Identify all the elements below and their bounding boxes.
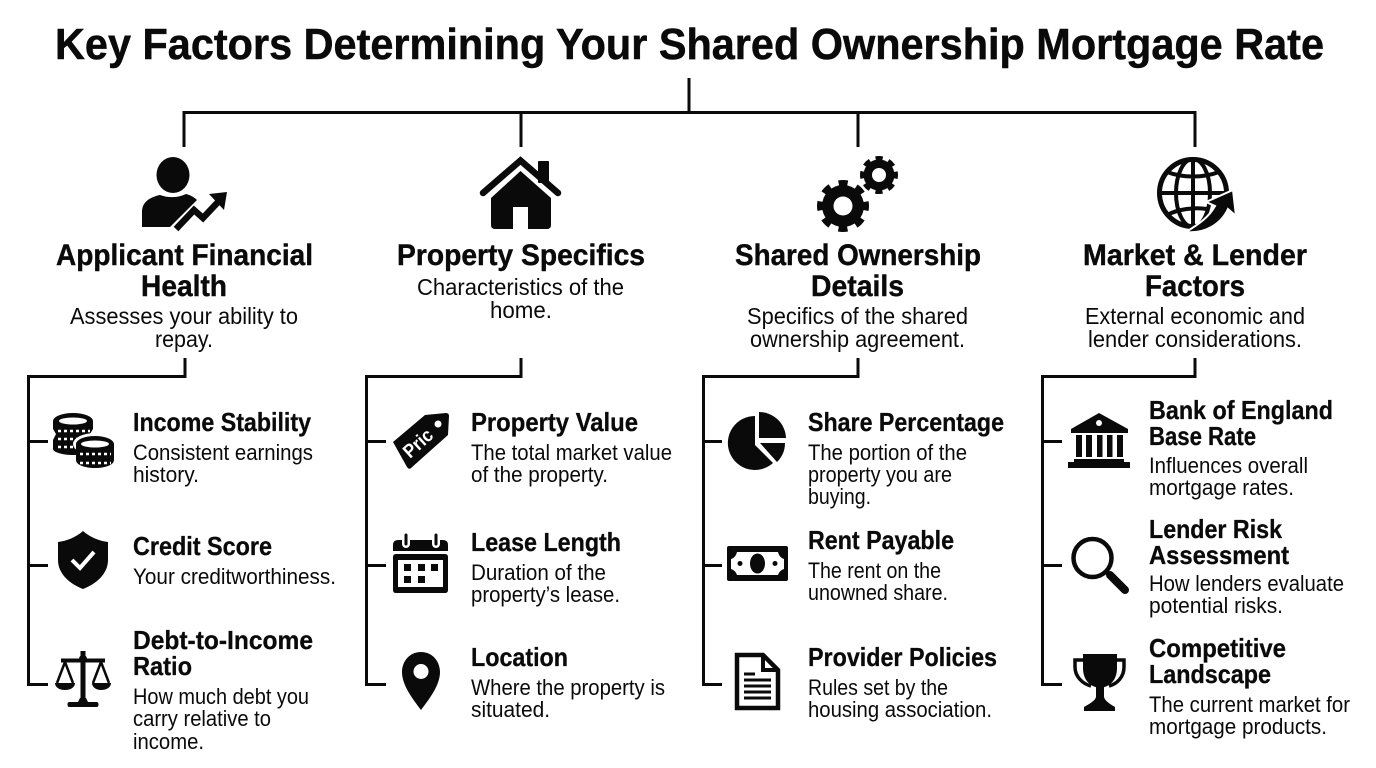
item: share percentage: Share Percentage [808,407,1004,437]
item: provider policies: housing association. [808,697,992,722]
item: debt-to-income ratio: How much debt you [133,684,309,709]
item: location: Location [471,642,568,672]
icon: magnifying glass [1074,539,1125,590]
item: income stability: Consistent earnings [133,440,313,465]
connector: applicant factors [28,358,185,684]
description [747,303,968,352]
item: competitive landscape [1075,633,1350,739]
item: credit score: Credit Score [133,531,272,561]
heading [1083,239,1307,303]
connector: shared ownership factors [704,358,858,684]
description: repay. [155,326,213,352]
item: location [402,642,665,722]
icon: shield with check [58,531,108,589]
item: bank of england base rate: Base Rate [1149,421,1256,451]
item: debt-to-income ratio [55,625,313,754]
heading [735,239,981,303]
icon: price tag [393,413,449,469]
item: property value: of the property. [471,462,608,487]
item: bank of england base rate: mortgage rates. [1149,475,1294,500]
description: External economic and [1085,303,1305,329]
connector: market factors [1042,358,1195,684]
item: lease length: property’s lease. [471,582,620,607]
item: lender risk assessment: How lenders evaluate [1149,571,1344,596]
description: Assesses your ability to [70,303,298,329]
item: bank of england base rate [1068,395,1333,500]
item: property value: Property Value [471,407,638,437]
icon: coins [53,413,117,468]
icon: person with rising arrow [142,157,227,229]
description: home. [490,297,552,323]
heading: Property Specifics [397,239,645,272]
icon: house [483,160,558,229]
item: share percentage [728,407,1004,509]
item: rent payable: Rent Payable [808,525,954,555]
item: location: situated. [471,697,550,722]
heading: Health [141,270,227,303]
heading: Factors [1145,270,1245,303]
panel: property specifics [366,160,672,722]
item: debt-to-income ratio: carry relative to [133,706,271,731]
title: Key Factors Determining Your Shared Ownership Mortgage Rate [55,20,1324,69]
item: bank of england base rate: Bank of England [1149,395,1333,425]
item: location: Where the property is [471,675,665,700]
panel: applicant financial health [28,157,336,754]
icon: banknote [727,546,788,581]
item: provider policies: Rules set by the [808,675,948,700]
item: bank of england base rate: Influences overall [1149,453,1308,478]
tree connector from title to four categories [184,78,1195,147]
item: lender risk assessment: potential risks. [1149,593,1283,618]
item: provider policies [737,642,997,722]
item: rent payable: The rent on the [808,558,941,583]
icon: pie chart [728,412,786,470]
heading: Details [811,270,904,303]
icon: bank building [1068,413,1130,468]
item: lease length: Duration of the [471,560,606,585]
item: competitive landscape: The current market for [1149,692,1350,717]
item: property value [393,407,672,487]
heading: Market & Lender [1083,239,1307,272]
item: share percentage: buying. [808,484,871,509]
item: income stability: history. [133,462,199,487]
icon: trophy [1075,654,1124,711]
item: lease length [393,527,621,607]
icon: document [737,655,778,708]
item: rent payable [727,525,954,605]
description: ownership agreement. [750,326,965,352]
item: income stability: Income Stability [133,407,311,437]
item: income stability [53,407,313,487]
item: credit score [58,531,336,589]
icon: gears [820,158,896,229]
icon: map pin [402,652,440,710]
heading [56,239,313,303]
item: competitive landscape: mortgage products. [1149,714,1327,739]
item: debt-to-income ratio: income. [133,729,204,754]
item: lender risk assessment: Assessment [1149,540,1289,570]
item: debt-to-income ratio: Debt-to-Income [133,625,313,655]
icon: balance scales [55,651,111,707]
item: debt-to-income ratio: Ratio [133,651,192,681]
item: credit score: Your creditworthiness. [133,564,336,589]
item: competitive landscape: Competitive [1149,633,1286,663]
heading: Shared Ownership [735,239,981,272]
item: lender risk assessment [1074,514,1344,618]
item: rent payable: unowned share. [808,580,948,605]
description: Specifics of the shared [747,303,968,329]
item: competitive landscape: Landscape [1149,659,1271,689]
item: provider policies: Provider Policies [808,642,997,672]
panel: market and lender factors [1042,159,1350,739]
icon: price tag: Pric [399,425,438,463]
icon: calendar [393,535,448,593]
item: lender risk assessment: Lender Risk [1149,514,1282,544]
description [1085,303,1305,352]
description [417,274,624,323]
description: lender considerations. [1088,326,1302,352]
description: Characteristics of the [417,274,624,300]
item: property value: The total market value [471,440,672,465]
item: share percentage: The portion of the [808,440,967,465]
panel: shared ownership details [704,158,1004,722]
heading: Applicant Financial [56,239,313,272]
icon: globe with arrow [1159,159,1236,232]
description [70,303,298,352]
item: lease length: Lease Length [471,527,621,557]
item: share percentage: property you are [808,462,952,487]
connector: property factors [366,358,521,684]
